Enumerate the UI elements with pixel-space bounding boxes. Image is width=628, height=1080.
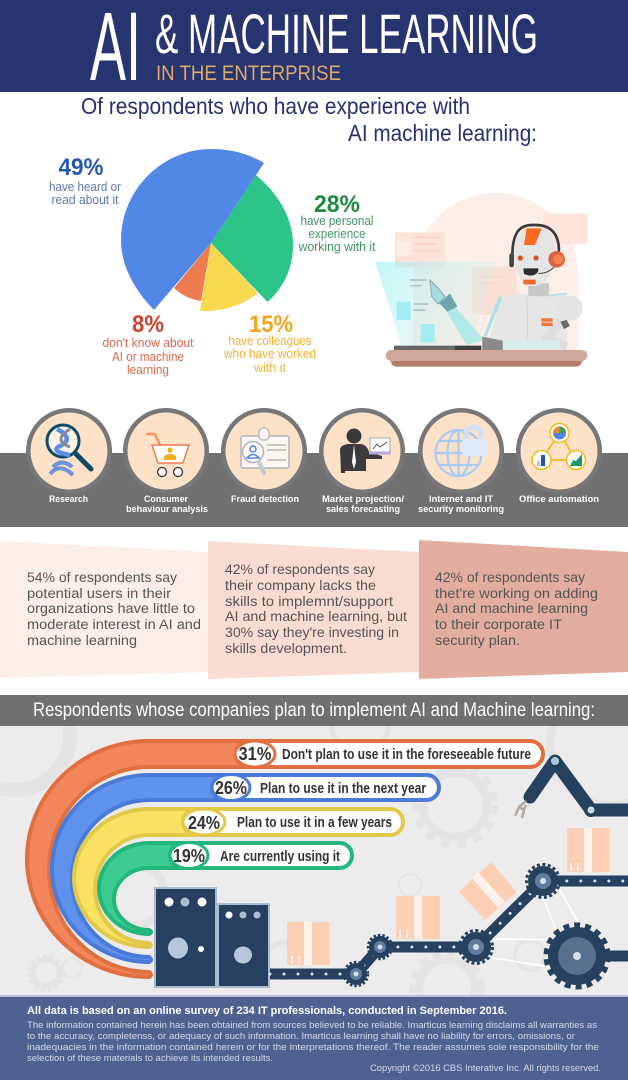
label: 49%: 49%: [58, 154, 104, 181]
use case: market projection: Market projection/: [322, 494, 405, 504]
panel: skills gap: [208, 541, 419, 679]
panel: skills gap: 42% of respondents say: [225, 561, 375, 577]
use case: consumer behaviour: Consumer: [144, 494, 188, 504]
use case: fraud detection: [221, 408, 307, 504]
slice: 49%: [121, 149, 264, 310]
slice: 8%: [174, 243, 211, 301]
use cases band: [0, 408, 628, 527]
label: 49%: read about it: [52, 193, 119, 207]
arc: 24% few years: 24%: [188, 813, 220, 833]
panel: low interest: machine learning: [27, 632, 137, 648]
label: 28%: 28%: [314, 191, 360, 218]
label: 15%: 15%: [249, 311, 293, 338]
disclaimer: inadequacies in the information contained herein or for the interpretations thereof. The reader assumes sole responsibility for the: [27, 1042, 599, 1053]
use case: office automation: [516, 408, 602, 504]
disclaimer: to the accuracy, completenss, or adequacy of such information. Imarticus learning shall have no liability for errors, omissions, or: [27, 1031, 575, 1042]
panel: security plan: 42% of respondents say: [435, 569, 585, 585]
arc: 19% currently using: 19%: [173, 846, 205, 866]
disclaimer: The information contained herein has been obtained from sources believed to be reliable. Imarticus learning disclaims all warranties as: [27, 1020, 597, 1031]
panel: security plan: [419, 540, 628, 679]
arc: 31% don't plan: Don't plan to use it in the foreseeable future: [282, 746, 531, 763]
label: 8%: AI or machine: [112, 350, 184, 364]
arc: 19% currently using: [99, 842, 352, 934]
label: 28%: [298, 191, 376, 254]
arc: 19% currently using: Are currently using it: [220, 848, 340, 865]
panel: security plan: to their corporate IT: [435, 616, 562, 632]
slice: 28%: [211, 175, 293, 302]
disclaimer: [27, 1020, 599, 1064]
use case: fraud detection: Fraud detection: [231, 494, 299, 504]
use case: security monitoring: security monitoring: [418, 504, 504, 514]
slice: 15%: [200, 243, 258, 311]
panel: skills gap: AI and machine learning, but: [225, 608, 407, 624]
label: 49%: [49, 154, 121, 207]
use case: research: Research: [49, 494, 88, 504]
use case: security monitoring: Internet and IT: [429, 494, 494, 504]
label: 8%: [102, 311, 194, 377]
panel: skills gap: skills to implemnt/support: [225, 593, 393, 609]
label: 8%: don't know about: [102, 336, 194, 350]
label: 15%: have colleagues: [228, 334, 312, 348]
subtitle: in the enterprise: IN THE ENTERPRISE: [156, 62, 341, 85]
panel: low interest: moderate interest in AI and: [27, 616, 201, 632]
label: 28%: have personal: [300, 214, 374, 228]
panel: low interest: 54% of respondents say: [27, 569, 177, 585]
label: 28%: experience: [308, 227, 366, 241]
use case: market projection: [319, 408, 405, 514]
machine: large block: [155, 888, 216, 987]
heading: respondents experience: AI machine learning:: [348, 120, 537, 146]
arc: 26% next year: Plan to use it in the next year: [260, 780, 426, 797]
use case: market projection: sales forecasting: [326, 504, 400, 514]
use case: consumer behaviour: [123, 408, 209, 514]
panel: skills gap: 30% say they're investing in: [225, 624, 399, 640]
panel: skills gap: skills development.: [225, 640, 347, 656]
label: 49%: have heard or: [49, 180, 121, 194]
background gears: [33, 957, 440, 988]
panel: security plan: security plan.: [435, 632, 520, 648]
robot illustration: [375, 193, 588, 367]
label: 28%: working with it: [298, 240, 376, 254]
arc: 26% next year: 26%: [215, 778, 247, 798]
panel: security plan: thet're working on adding: [435, 585, 598, 601]
panel: low interest: [0, 541, 208, 678]
arc: 31% don't plan: 31%: [238, 744, 272, 764]
panel: low interest: organizations have little to: [27, 600, 195, 616]
boxes on conveyor: [287, 828, 610, 965]
label: 8%: learning: [127, 363, 169, 377]
panel: security plan: AI and machine learning: [435, 600, 588, 616]
disclaimer: selection of these materials to achieve its intended results.: [27, 1053, 273, 1064]
copyright: Copyright ©2016 CBS Interative Inc. All rights reserved.: [370, 1063, 601, 1074]
section: implementation plans: [0, 695, 628, 995]
heading: respondents experience: Of respondents who have experience with: [81, 93, 470, 119]
label: 15%: [223, 311, 316, 375]
label: 8%: 8%: [132, 311, 164, 338]
panel: low interest: potential users in their: [27, 585, 171, 601]
survey note: All data is based on an online survey of 234 IT professionals, conducted in September 2016.: [27, 1005, 507, 1017]
panel: skills gap: their company lacks the: [225, 577, 376, 593]
conveyor belt: [270, 881, 628, 974]
arc: 24% few years: [74, 809, 403, 947]
conveyor gears: [344, 864, 608, 987]
arc: 31% don't plan: [27, 741, 543, 977]
machine: small block: [218, 904, 269, 987]
arc: 24% few years: Plan to use it in a few years: [237, 814, 392, 831]
label: 15%: with it: [253, 361, 287, 375]
arc: 26% next year: [52, 774, 439, 962]
heading: respondents experience: [81, 93, 537, 146]
section heading: [0, 695, 628, 726]
pie chart: [121, 149, 293, 311]
use case: security monitoring: [418, 408, 504, 514]
footer: [0, 995, 628, 1080]
use case: research: [26, 408, 112, 504]
use case: consumer behaviour: behaviour analysis: [126, 504, 208, 514]
label: 15%: who have worked: [223, 347, 316, 361]
robotic arm: [515, 757, 628, 818]
use case: office automation: Office automation: [519, 494, 599, 504]
header banner: [0, 0, 628, 101]
